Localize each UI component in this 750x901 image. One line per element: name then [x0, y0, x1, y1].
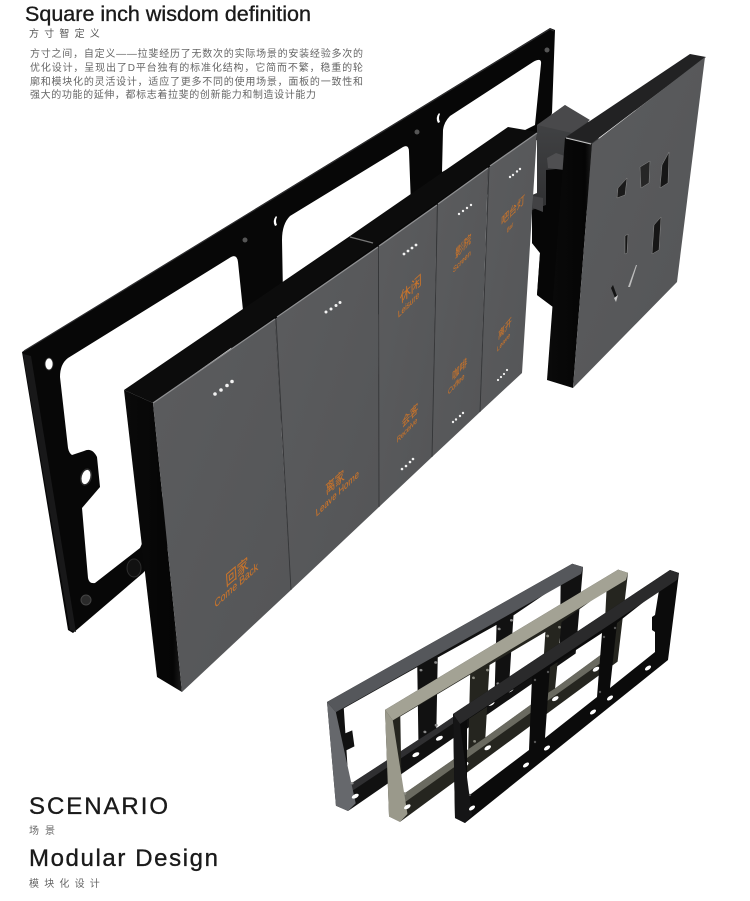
- switch panel 1: [153, 319, 291, 692]
- panel labels: Leisure: [398, 289, 419, 320]
- panel labels: 离家: [325, 466, 345, 498]
- gray frame top strip: [318, 558, 593, 718]
- frame hole middle: [79, 468, 93, 486]
- socket side: [547, 138, 592, 388]
- frame bevel highlight: [24, 29, 554, 351]
- frame hole top left: [45, 358, 53, 370]
- panel labels: [214, 191, 525, 611]
- switch panel 5: [480, 133, 537, 412]
- panel labels: Bar: [507, 221, 513, 235]
- panel labels: Leave: [497, 331, 510, 354]
- champagne frame top strip: [382, 562, 631, 728]
- panel labels: Leave Home: [316, 468, 359, 520]
- panel labels: 会客: [402, 400, 418, 431]
- socket face: [573, 57, 705, 388]
- connector bump: [547, 153, 565, 170]
- panel edge highlights: [153, 133, 537, 403]
- connector block behind socket: [532, 105, 600, 307]
- gray frame slots: [342, 653, 566, 804]
- switch panel 2: [275, 247, 379, 590]
- black frame screws: [469, 627, 616, 796]
- champagne frame lower wall: [399, 647, 607, 810]
- gray frame screws: [340, 615, 524, 788]
- socket edge highlight: [566, 138, 591, 144]
- panel labels: Screen: [453, 248, 471, 275]
- champagne frame left strip: [385, 710, 408, 822]
- connector black lower block: [532, 168, 566, 307]
- heading: modular design: Modular Design: [29, 845, 218, 872]
- description text block: [30, 47, 363, 101]
- panel labels: 咖啡: [452, 354, 467, 384]
- description text block: 优化设计，呈现出了D平台独有的标准化结构，它简而不繁，稳重的轮: [30, 61, 363, 74]
- description text block: 强大的功能的延伸，都标志着拉斐的创新能力和制造设计能力: [30, 88, 316, 101]
- frame lower boss: [127, 559, 141, 577]
- panel labels: 吧台灯: [501, 191, 525, 229]
- connector tab: [533, 196, 543, 212]
- gray frame left strip: [327, 702, 356, 811]
- connector top surface: [537, 105, 590, 133]
- switch module: [124, 127, 537, 692]
- switch top surface: [124, 127, 537, 403]
- gray frame lower wall: [339, 641, 571, 797]
- champagne frame screws: [400, 621, 564, 800]
- panel labels: Coffee: [448, 371, 465, 397]
- title: Square inch wisdom definition: [25, 3, 311, 26]
- champagne frame slots: [401, 660, 603, 816]
- back mounting frame: [22, 28, 555, 633]
- frame left edge: [23, 354, 76, 632]
- black frame left strip: [453, 714, 472, 823]
- panel labels: 休闲: [400, 271, 422, 308]
- panel labels: 回家: [225, 555, 249, 591]
- heading: scenario: SCENARIO: [29, 793, 168, 820]
- socket module: [547, 54, 706, 388]
- socket top surface: [566, 54, 706, 143]
- modular frame: gray: [318, 558, 599, 816]
- subtitle: 方寸智定义: [29, 27, 105, 40]
- frame screw: [81, 595, 91, 605]
- socket holes: [611, 152, 669, 302]
- black frame top strip: [453, 570, 679, 724]
- black frame slots: [468, 665, 652, 811]
- panel dividers: [276, 168, 489, 590]
- description text block: 廓和模块化的灵活设计，适应了更多不同的使用场景，面板的一致性和: [30, 75, 363, 88]
- description text block: 方寸之间，自定义——拉斐经历了无数次的实际场景的安装经验多次的: [30, 47, 363, 60]
- modular design subtitle: 模块化设计: [29, 877, 105, 890]
- panel labels: Receive: [397, 415, 418, 445]
- switch panel 3: [378, 205, 437, 507]
- scenario subtitle: 场景: [29, 824, 61, 837]
- indicator dots: [213, 168, 521, 470]
- frame hooks and screws: [242, 48, 550, 242]
- panel labels: Come Back: [214, 560, 259, 611]
- switch left side: [124, 390, 182, 692]
- modular frame: champagne: [382, 562, 632, 829]
- modular frame: black: [453, 570, 679, 823]
- panel labels: 影院: [455, 231, 472, 262]
- switch top step highlight: [350, 237, 373, 243]
- switch panel 4: [432, 168, 488, 457]
- panel labels: 离开: [498, 314, 512, 343]
